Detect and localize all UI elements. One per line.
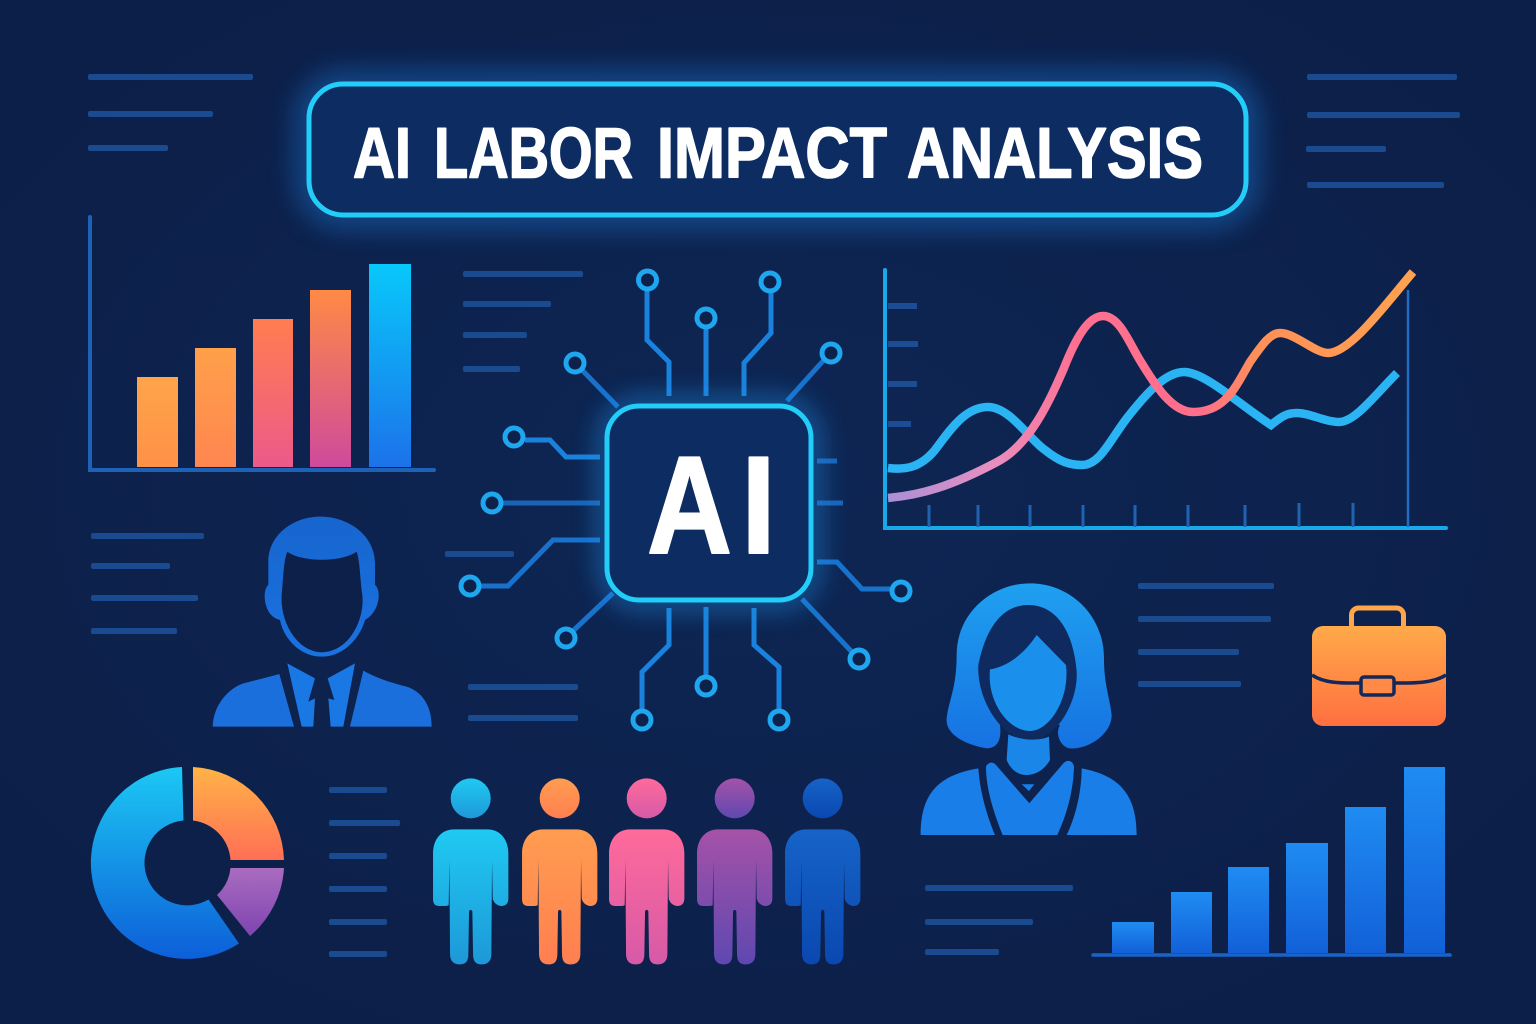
icon: AI chip with circuit traces <box>461 271 910 729</box>
panel: title banner <box>309 84 1246 215</box>
pie chart: donut with three segments <box>91 767 284 959</box>
pink to orange trend line <box>888 272 1413 498</box>
text block: top-left placeholder lines <box>88 74 253 151</box>
person 5: blue <box>785 778 860 964</box>
text block: top-right placeholder lines <box>1306 74 1460 188</box>
chip label: A <box>647 428 732 583</box>
heading: title text: LABOR <box>434 114 633 194</box>
right guide and ticks <box>888 290 1408 527</box>
person 2: orange <box>522 778 597 964</box>
person 1: cyan <box>433 778 508 964</box>
bar chart: rising multicolor bars <box>90 217 434 470</box>
person 3: pink <box>609 778 684 964</box>
heading: title text: IMPACT <box>657 114 887 194</box>
circuit traces <box>481 291 890 709</box>
icon: woman portrait <box>921 583 1137 835</box>
text block: short line left of chip <box>445 551 514 557</box>
chip label: I <box>741 428 776 583</box>
heading: title text: ANALYSIS <box>907 114 1203 194</box>
bar chart: bottom-right blue bars <box>1093 767 1450 955</box>
heading: title text: AI <box>353 114 411 194</box>
legend: donut placeholder lines <box>329 787 400 957</box>
text block: bottom-center placeholder lines <box>925 885 1073 955</box>
person 4: purple <box>697 778 772 964</box>
chart axes <box>885 270 1446 528</box>
text block: lines under chip <box>468 684 578 721</box>
icon: briefcase <box>1312 608 1446 726</box>
circuit nodes <box>461 271 910 729</box>
icon: man in suit <box>213 517 432 727</box>
icon group: five colored people <box>433 778 860 964</box>
line chart: two trend lines <box>885 270 1446 528</box>
text block: center-left placeholder lines <box>463 271 583 372</box>
text block: lines right of woman <box>1138 583 1274 687</box>
text block: left-middle placeholder lines <box>91 533 204 634</box>
blue trend line <box>888 372 1397 469</box>
